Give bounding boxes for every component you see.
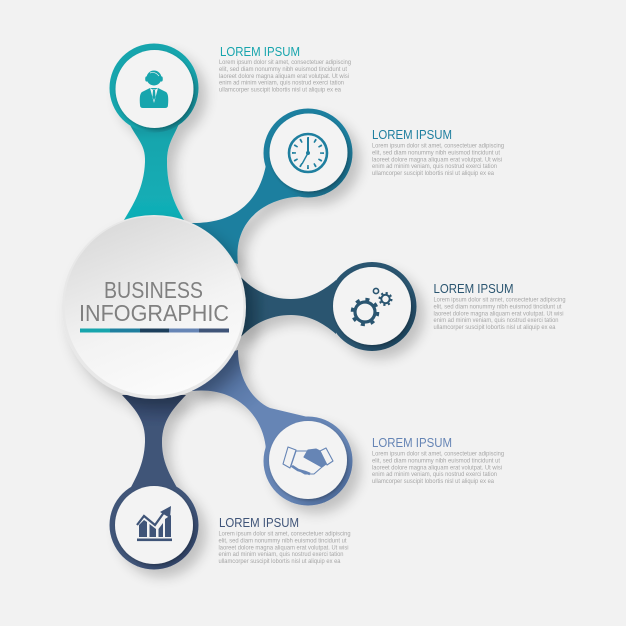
icon: clock xyxy=(289,134,327,172)
title bar xyxy=(80,328,229,332)
title: BUSINESS xyxy=(104,277,203,303)
text block 5: ullamcorper suscipit lobortis nisl ut aliquip ex ea xyxy=(218,558,341,565)
text block 2: enim ad minim veniam, quis nostrud exerci tation xyxy=(372,163,497,170)
disc 5 with chart icon xyxy=(115,486,193,564)
text block 3: LOREM IPSUM xyxy=(434,281,514,296)
text block 5 xyxy=(218,515,351,565)
disc 3 with gears icon xyxy=(333,267,411,345)
node 5: slate branch xyxy=(110,395,198,570)
text block 4: Lorem ipsum dolor sit amet, consectetuer adipiscing xyxy=(372,450,504,458)
text block 1 xyxy=(219,44,351,94)
text block 1: elit, sed diam nonummy nibh euismod tincidunt ut xyxy=(219,66,347,73)
text block 2: laoreet dolore magna aliquam erat volutpat. Ut wisi xyxy=(372,156,502,163)
node 3: navy teal branch xyxy=(238,262,416,351)
disc 2 with clock icon xyxy=(270,114,348,192)
icon: businessman xyxy=(140,70,168,108)
text block 1: ullamcorper suscipit lobortis nisl ut aliquip ex ea xyxy=(219,87,341,94)
text block 5: LOREM IPSUM xyxy=(219,515,299,530)
text block 1: LOREM IPSUM xyxy=(220,44,300,59)
node 1: teal branch xyxy=(110,44,198,220)
central disc xyxy=(62,215,246,399)
title: INFOGRAPHIC xyxy=(79,300,229,326)
text block 5: Lorem ipsum dolor sit amet, consectetuer adipiscing xyxy=(218,530,351,538)
text block 1: laoreet dolore magna aliquam erat volutpat. Ut wisi xyxy=(219,73,349,80)
text block 4: ullamcorper suscipit lobortis nisl ut aliquip ex ea xyxy=(372,478,494,485)
text block 5: elit, sed diam nonummy nibh euismod tincidunt ut xyxy=(218,537,347,544)
text block 3: ullamcorper suscipit lobortis nisl ut aliquip ex ea xyxy=(434,324,556,331)
text block 4: elit, sed diam nonummy nibh euismod tincidunt ut xyxy=(372,457,500,464)
text block 1: Lorem ipsum dolor sit amet, consectetuer adipiscing xyxy=(219,59,351,66)
text block 2 xyxy=(372,127,504,177)
text block 4: laoreet dolore magna aliquam erat volutpat. Ut wisi xyxy=(372,464,502,471)
text block 2: LOREM IPSUM xyxy=(372,127,452,142)
text block 3: enim ad minim veniam, quis nostrud exerci tation xyxy=(434,317,559,324)
text block 2: Lorem ipsum dolor sit amet, consectetuer adipiscing xyxy=(372,142,504,150)
text block 3: laoreet dolore magna aliquam erat volutpat. Ut wisi xyxy=(434,310,564,317)
text block 4: LOREM IPSUM xyxy=(372,435,452,450)
text block 5: enim ad minim veniam, quis nostrud exerci tation xyxy=(218,551,344,558)
disc 1 with person icon xyxy=(116,50,194,128)
icon: gears xyxy=(352,288,392,325)
text block 2: elit, sed diam nonummy nibh euismod tincidunt ut xyxy=(372,149,500,156)
text block 1: enim ad minim veniam, quis nostrud exerci tation xyxy=(219,80,344,87)
title xyxy=(79,277,229,326)
icon: handshake xyxy=(283,447,333,474)
icon: growth chart xyxy=(137,506,172,541)
text block 3 xyxy=(434,281,566,331)
text block 4 xyxy=(372,435,504,485)
node 4: periwinkle branch xyxy=(192,350,352,506)
text block 5: laoreet dolore magna aliquam erat volutpat. Ut wisi xyxy=(218,544,348,551)
disc 4 with handshake icon xyxy=(269,421,347,499)
node 2: blue branch xyxy=(190,108,352,264)
text block 2: ullamcorper suscipit lobortis nisl ut aliquip ex ea xyxy=(372,170,494,177)
text block 4: enim ad minim veniam, quis nostrud exerci tation xyxy=(372,471,497,478)
text block 3: Lorem ipsum dolor sit amet, consectetuer adipiscing xyxy=(434,296,566,304)
text block 3: elit, sed diam nonummy nibh euismod tincidunt ut xyxy=(434,303,562,310)
